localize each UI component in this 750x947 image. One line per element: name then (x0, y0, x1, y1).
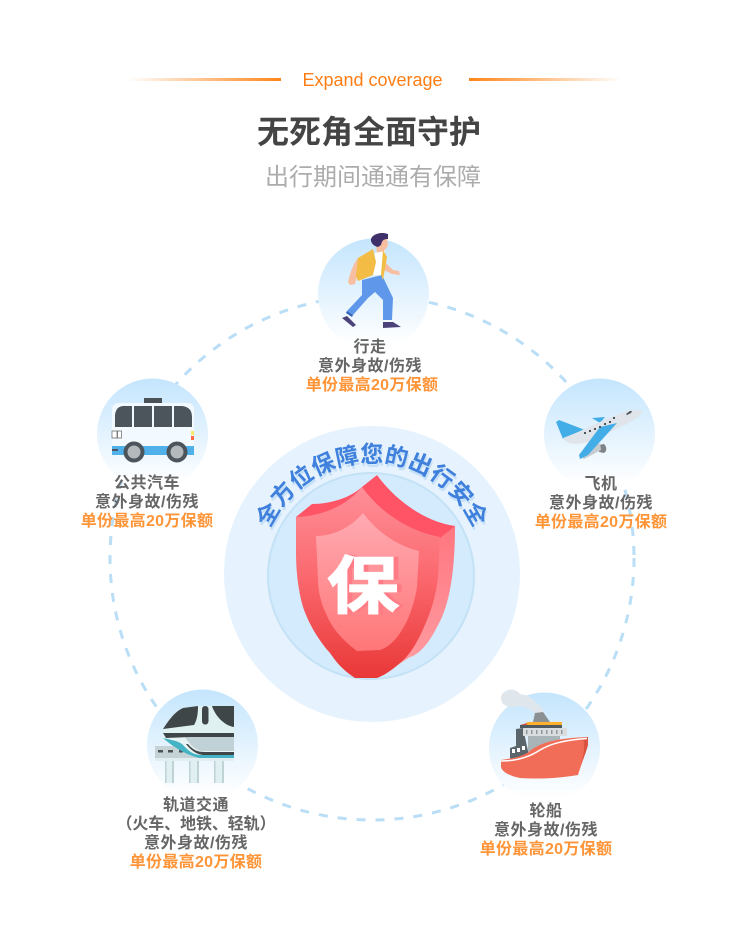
header rule left (128, 78, 281, 81)
shield top band (296, 475, 455, 538)
label: rail: 意外身故/伤残 (144, 835, 248, 852)
label: plane: 单份最高20万保额 (535, 514, 667, 531)
bus rear wheel (168, 444, 186, 460)
shield (296, 475, 455, 678)
label: bus: 意外身故/伤残 (95, 494, 199, 511)
plane bubble (544, 378, 655, 490)
icon: train (147, 690, 258, 800)
walker neck (376, 244, 385, 254)
train lower panel (185, 737, 234, 751)
ship bubble (489, 692, 600, 804)
train windscreen (163, 706, 198, 729)
subtitle: 出行期间通通有保障 (265, 164, 481, 191)
ship smoke (501, 690, 544, 714)
shield right side (378, 526, 455, 678)
walker hair (371, 233, 388, 247)
label: bus: 单份最高20万保额 (81, 513, 213, 530)
ship lower deck (528, 736, 560, 752)
label: ship: 单份最高20万保额 (480, 841, 612, 858)
shield inner panel (316, 513, 419, 651)
bus body (112, 403, 194, 455)
train dark line (186, 744, 234, 755)
label: plane: 飞机 (584, 476, 618, 493)
dashed orbit ring (110, 296, 634, 820)
plane fuselage (563, 410, 642, 444)
header rule right (469, 78, 622, 81)
icon: bus (97, 378, 208, 490)
walker bubble (318, 238, 429, 350)
walker front arm (384, 262, 400, 275)
train door window (202, 706, 208, 724)
ship dark band (520, 725, 562, 728)
second carriage (155, 746, 200, 758)
bus bubble (97, 378, 208, 490)
eyebrow: Expand coverage: Expand coverage (302, 70, 443, 90)
plane belly (579, 443, 601, 459)
bus door mark (112, 431, 122, 438)
bus bumper mark (112, 449, 118, 451)
ship funnel (533, 712, 550, 722)
label: walking: 意外身故/伤残 (318, 358, 422, 375)
ship cabin windows (512, 746, 525, 753)
bus windows (115, 406, 192, 427)
walker jacket right (381, 250, 387, 280)
ship bow shade (581, 737, 588, 763)
bus roof unit (144, 398, 162, 403)
bus stripe (112, 446, 194, 455)
train lower body (163, 736, 234, 758)
train teal stripe (163, 738, 234, 758)
label: rail: 单份最高20万保额 (130, 854, 262, 871)
icon: ship (489, 690, 600, 804)
icon: airplane (544, 378, 655, 490)
label: ship: 轮船 (529, 803, 562, 820)
walker face (377, 238, 388, 249)
carriage windows (158, 750, 193, 752)
shield character shadow: 保 (332, 552, 404, 622)
ship portholes (526, 730, 562, 734)
plane far wing (592, 417, 605, 423)
label: ship: 意外身故/伤残 (494, 822, 598, 839)
inner circle (268, 473, 474, 679)
icon: walking person (318, 233, 429, 350)
label: bus: 公共汽车 (114, 475, 180, 492)
train side window (212, 706, 234, 727)
shield character: 保 (327, 552, 399, 622)
label: plane: 意外身故/伤残 (549, 495, 653, 512)
walker shoe right (383, 322, 401, 328)
ship roof tip (520, 723, 527, 728)
ship cabin dark (510, 728, 530, 760)
ship hull (501, 737, 588, 779)
central halo (224, 426, 520, 722)
pillar shading (165, 761, 224, 783)
label: ship (480, 802, 612, 858)
ship upper deck (523, 728, 567, 736)
bus lights (191, 431, 194, 435)
walker shoe left (342, 316, 356, 327)
label: bus (81, 474, 213, 530)
shield face (296, 487, 440, 678)
walker trousers (347, 275, 393, 320)
plane windows (584, 418, 615, 433)
plane main wing (579, 423, 617, 459)
train waistline (163, 733, 234, 738)
title: 无死角全面守护 (257, 114, 481, 150)
train bubble (147, 690, 258, 800)
walker trouser cuff (346, 311, 353, 317)
ship roof (527, 722, 562, 725)
plane tail fin (556, 420, 585, 439)
curved slogan: 全方位保障您的出行安全 (258, 442, 487, 530)
train upper body (163, 706, 234, 733)
walker jacket left (356, 249, 376, 281)
label: walking: 行走 (353, 339, 386, 356)
walker back arm (348, 258, 363, 285)
label: walking: 单份最高20万保额 (306, 377, 438, 394)
bus tail light (191, 436, 194, 440)
label: rail: （火车、地铁、轻轨） (116, 816, 276, 833)
plane cockpit (626, 411, 632, 415)
label: plane (535, 475, 667, 531)
label: rail (116, 796, 276, 871)
ship hull stripe (501, 738, 587, 761)
plane engine (599, 444, 606, 453)
label: walking (306, 338, 438, 394)
label: rail: 轨道交通 (163, 797, 229, 814)
deck (155, 758, 234, 761)
pillars (165, 761, 224, 783)
walker tank top (372, 251, 385, 275)
bus front wheel (126, 444, 142, 460)
